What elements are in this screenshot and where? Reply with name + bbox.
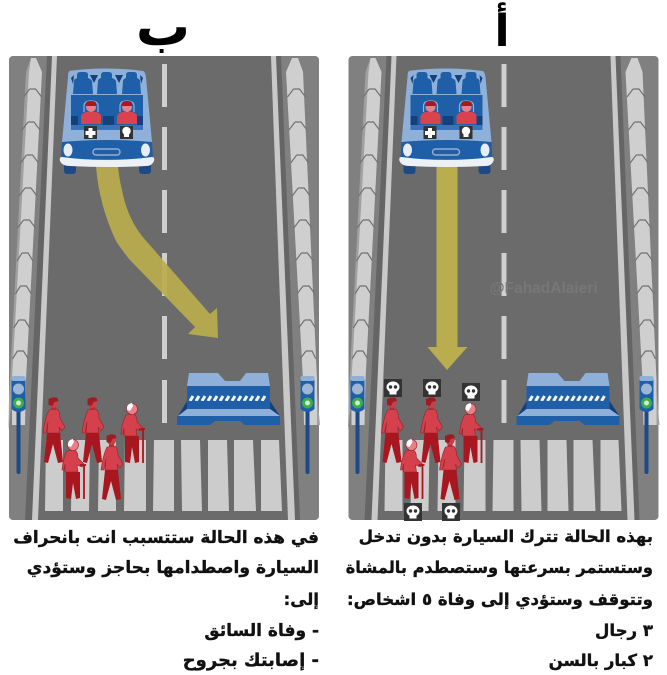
text block: scenario B description: - وفاة السائق (204, 621, 319, 641)
arrow: straight path (428, 166, 468, 370)
pedestrians (382, 397, 484, 500)
text block: scenario B description: - إصابتك بجروح (183, 650, 319, 671)
traffic light left (12, 376, 26, 474)
bus with passengers (399, 68, 494, 174)
text block: scenario A description (346, 527, 653, 670)
heading: A: أ (494, 2, 510, 57)
text block: scenario A description: ٣ رجال (595, 621, 653, 640)
text block: scenario B description: السيارة واصطدامها بحاجز وستؤدي (27, 558, 319, 578)
bus with passengers (60, 68, 154, 174)
concrete barrier (516, 373, 620, 425)
road scene B (8, 56, 320, 520)
pedestrians (43, 397, 145, 500)
text block: scenario A description: وستستمر بسرعتها وستصطدم بالمشاة (346, 558, 653, 577)
panel: scenario B (8, 56, 320, 520)
arrow: swerve path (96, 166, 218, 338)
text block: scenario A description: بهذه الحالة تترك السيارة بدون تدخل (359, 527, 653, 546)
text block: scenario B description: إلى: (284, 590, 319, 609)
text block: scenario A description: ٢ كبار بالسن (549, 651, 653, 670)
traffic light right (640, 376, 654, 474)
panel: scenario A (348, 56, 660, 521)
traffic light left (350, 376, 364, 474)
skull markers (384, 379, 480, 521)
text block: scenario B description (13, 527, 319, 671)
text block: scenario A description: وتتوقف وستؤدي إلى وفاة ٥ اشخاص: (347, 590, 653, 609)
concrete barrier (177, 373, 280, 425)
road scene A (348, 56, 660, 520)
watermark: @FahadAlaieri (490, 280, 598, 297)
text block: scenario B description: في هذه الحالة ستتسبب انت بانحراف (13, 527, 319, 547)
traffic light right (300, 376, 314, 474)
